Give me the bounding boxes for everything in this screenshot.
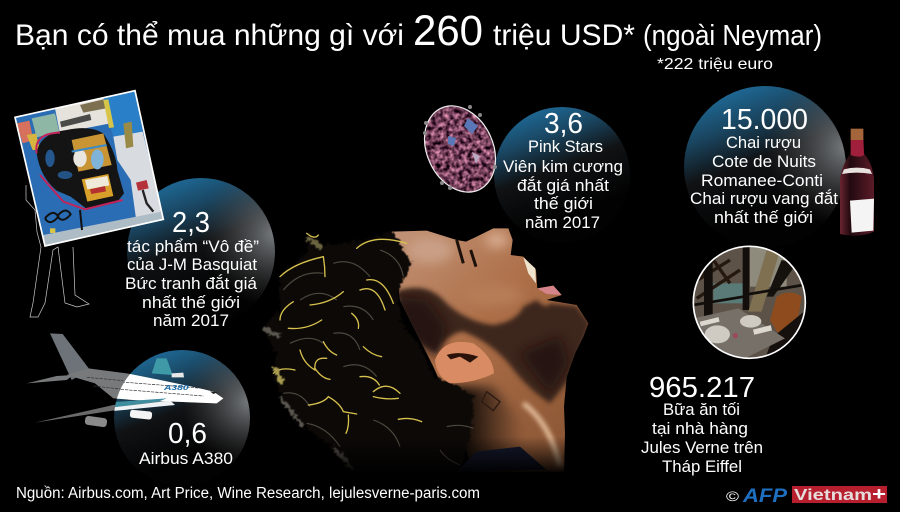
title: (ngoài Neymar): [643, 20, 822, 52]
lips: [537, 286, 562, 295]
neck highlight: [523, 403, 560, 467]
icon: person holding painting: [26, 185, 89, 317]
plane inside circle: white: A380: [163, 383, 189, 392]
value and description: wine: Chai rượu: [726, 133, 801, 152]
value and description: painting: [125, 207, 259, 330]
hair mass: [262, 232, 473, 473]
icon: Airbus A380 plane: [27, 333, 223, 427]
circle backdrop: painting: [127, 178, 275, 326]
plane inside circle: white: [114, 358, 224, 420]
value and description: painting: nhất thế giới: [142, 293, 240, 312]
inner ear: [447, 353, 478, 363]
value and description: wine: Chai rượu vang đắt: [690, 189, 838, 208]
icon: Untitled painting: [15, 91, 165, 247]
footnote: euro conversion: *222 triệu euro: [657, 56, 773, 73]
logo: AFP Vietnam+: ©: [726, 488, 740, 504]
value and description: diamond: Viên kim cương: [503, 157, 623, 176]
value and description: airbus: [139, 418, 233, 468]
title: Bạn có thể mua những gì với: [15, 19, 404, 52]
neck shadow: [442, 378, 520, 459]
value and description: dinner: Bữa ăn tối: [663, 400, 740, 419]
hair wisps: [283, 250, 473, 465]
value and description: diamond: Pink Stars: [528, 137, 603, 156]
yellow curls: [273, 233, 422, 433]
value and description: diamond: 3,6: [544, 108, 583, 140]
panel: Pink Star diamond: [423, 105, 630, 228]
panel: Basquiat painting: [15, 91, 275, 330]
eyebrow and eye: [457, 240, 476, 267]
value and description: diamond: [503, 108, 623, 232]
photo: restaurant table in Eiffel Tower: [690, 243, 810, 363]
tattoo: [482, 392, 500, 411]
plane outside circle: grey: [27, 333, 223, 427]
value and description: painting: 2,3: [172, 207, 210, 239]
logo: AFP Vietnam+: [726, 484, 887, 507]
grey and yellow hair fringe: [263, 237, 353, 470]
value and description: wine: 15.000: [721, 104, 808, 136]
forehead and nose highlight: [407, 232, 523, 307]
value and description: wine: nhất thế giới: [714, 208, 813, 227]
beard dark core: [397, 297, 568, 393]
circle backdrop: diamond: [494, 107, 630, 243]
value and description: painting: năm 2017: [153, 311, 229, 330]
title: 260: [413, 7, 483, 55]
value and description: dinner: Tháp Eiffel: [662, 457, 742, 476]
value and description: wine: Romanee-Conti: [701, 171, 823, 190]
value and description: diamond: đắt giá nhất: [517, 176, 609, 195]
teeth: [523, 257, 536, 283]
value and description: wine: Cote de Nuits: [712, 152, 816, 171]
value and description: diamond: thế giới: [534, 194, 593, 213]
circle backdrop: wine: [684, 86, 846, 248]
shirt collar: [457, 447, 547, 472]
fade at neck base: [327, 437, 570, 475]
circle backdrop: airbus: [114, 350, 250, 486]
logo: AFP Vietnam+: +: [872, 484, 886, 504]
value and description: dinner: tại nhà hàng: [652, 419, 748, 438]
shading and beard, clipped to the face: [397, 232, 590, 477]
panel: Airbus A380: [27, 333, 250, 464]
panel: Romanee-Conti wine: [684, 86, 874, 248]
beard outer: [397, 288, 590, 403]
title: triệu USD*: [493, 19, 635, 52]
ear: [435, 342, 494, 383]
source line: Nguồn: Airbus.com, Art Price, Wine Research, lejulesverne-paris.com: [16, 485, 480, 502]
icon: Pink Star diamond: [423, 105, 497, 193]
value and description: dinner: [641, 372, 763, 476]
value and description: airbus: 0,6: [168, 418, 207, 450]
value and description: diamond: năm 2017: [525, 213, 600, 232]
value and description: airbus: Airbus A380: [139, 449, 233, 468]
face and neck skin: [392, 228, 588, 472]
value and description: dinner: Jules Verne trên: [641, 438, 763, 457]
value and description: painting: Bức tranh đắt giá: [125, 274, 258, 293]
panel: Jules Verne dinner: [641, 243, 810, 476]
icon: wine bottle: [840, 129, 874, 236]
value and description: dinner: 965.217: [649, 372, 755, 404]
title: [15, 7, 822, 55]
value and description: painting: của J-M Basquiat: [127, 255, 257, 274]
value and description: wine: [690, 104, 838, 227]
photo: Neymar head tilted back: [262, 228, 590, 477]
logo: AFP Vietnam+: AFP: [742, 486, 787, 507]
logo: AFP Vietnam+: Vietnam: [794, 487, 872, 504]
value and description: painting: tác phẩm “Vô đề”: [127, 237, 259, 256]
